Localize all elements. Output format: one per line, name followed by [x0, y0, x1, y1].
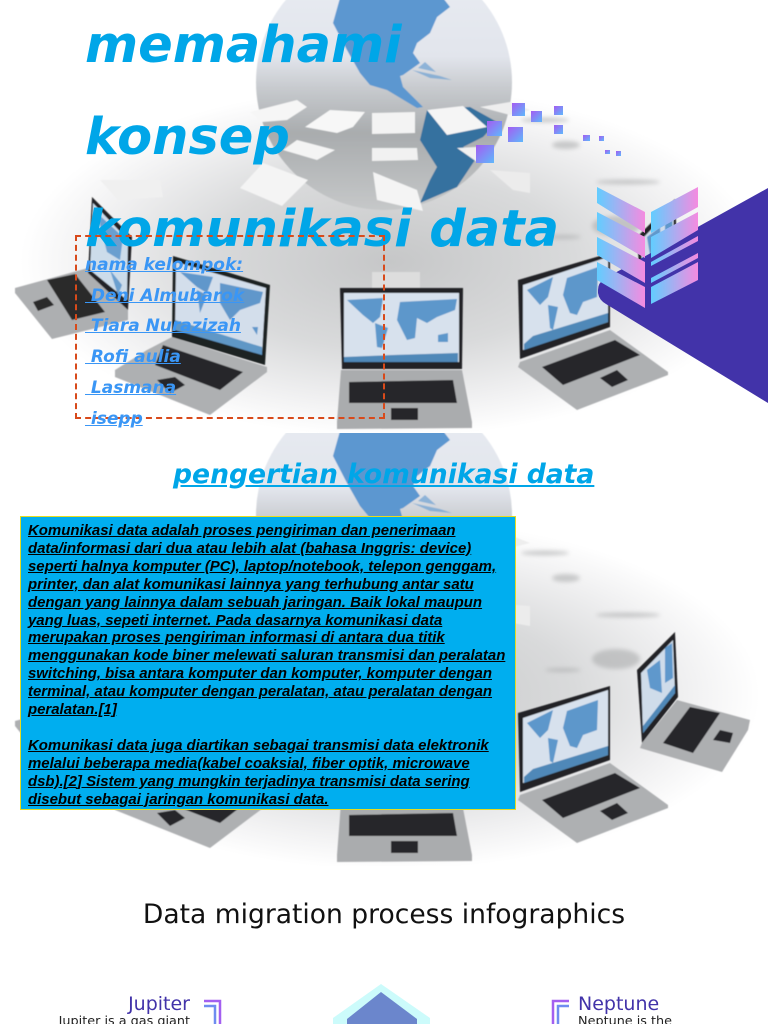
text panel: definition: dengan yang lainnya dalam sebuah jaringan. Baik lokal maupun — [28, 594, 482, 611]
text panel: definition: merupakan proses pengiriman informasi di antara dua titik — [28, 629, 445, 646]
text panel: definition: printer, dan alat komunikasi lainnya yang terhubung antar satu — [28, 576, 474, 593]
title: konsep — [85, 108, 290, 167]
text panel: definition: Komunikasi data juga diartikan sebagai transmisi data elektronik — [28, 737, 489, 754]
text panel: definition: switching, bisa antara komputer dan komputer, komputer dengan — [28, 665, 492, 682]
heading: data migration process infographics: Data migration process infographics — [143, 899, 625, 930]
group member dashed box — [75, 235, 385, 419]
text panel: definition: terminal, atau komputer dengan peralatan, atau peralatan dengan — [28, 683, 492, 700]
icon: striped chevron stack — [597, 187, 698, 308]
text panel: definition: melalui beberapa media(kabel coaksial, fiber optik, microwave — [28, 755, 470, 772]
text panel: definition: yang luas, sepeti internet. Pada dasarnya komunikasi data — [28, 612, 442, 629]
text panel: definition: menggunakan kode biner melewati saluran transmisi dan peralatan — [28, 647, 505, 664]
title: memahami — [85, 16, 402, 75]
text panel: definition: disebut sebagai jaringan komunikasi data. — [28, 791, 328, 808]
group member names: nama kelompok: Deni Almubarok Tiara Nurazizah Rofi aulia Lasmana isepp — [85, 255, 244, 429]
title — [85, 16, 559, 259]
slide 3 white panel — [0, 866, 768, 1024]
text panel: definition: dsb).[2] Sistem yang mungkin terjadinya transmisi data sering — [28, 773, 470, 790]
icon: Neptune bracket — [553, 1001, 569, 1024]
title: komunikasi data — [85, 200, 559, 259]
label: Jupiter: Jupiter — [128, 993, 190, 1015]
text panel: definition: data/informasi dari dua atau lebih alat (bahasa Inggris: device) — [28, 540, 471, 557]
purple corner shape — [598, 188, 768, 403]
icon: floating data squares — [476, 103, 621, 163]
text panel: definition — [20, 516, 516, 810]
slide 2 background: globe and laptops — [0, 387, 768, 870]
text panel: definition: peralatan.[1] — [28, 701, 117, 718]
slide 1 background: globe and laptops — [0, 0, 768, 437]
text panel: definition: seperti halnya komputer (PC), laptop/notebook, telepon genggam, — [28, 558, 496, 575]
icon: central hexagon — [333, 984, 430, 1024]
text panel: definition: Komunikasi data adalah proses pengiriman dan penerimaan — [28, 522, 456, 539]
icon: Jupiter bracket — [204, 1001, 220, 1024]
heading: pengertian komunikasi data: pengertian komunikasi data — [173, 459, 594, 490]
label: Neptune: Neptune — [578, 993, 659, 1015]
